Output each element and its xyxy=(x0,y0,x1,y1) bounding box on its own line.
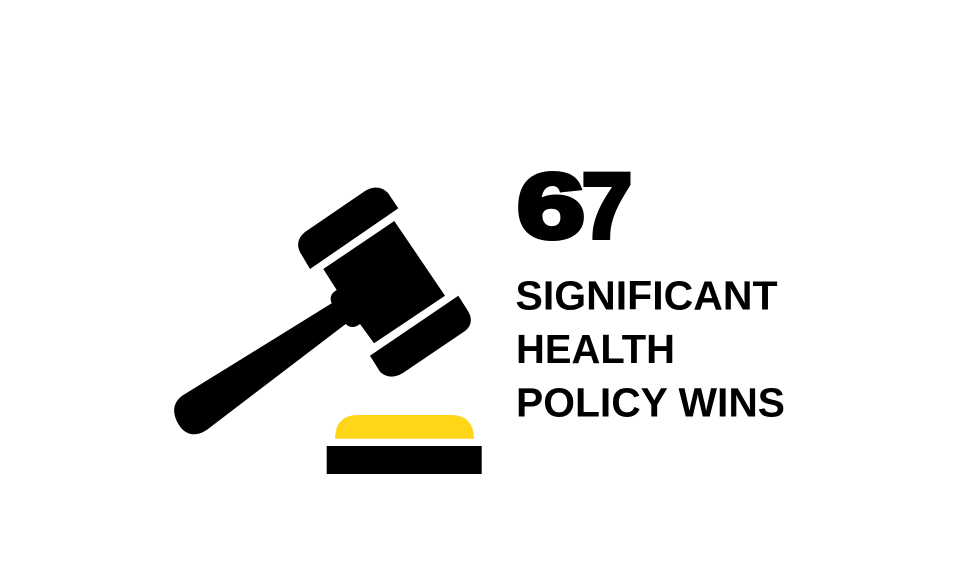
gavel head top cap xyxy=(298,187,398,269)
gavel head body and handle xyxy=(174,221,445,434)
digit 6: 6 xyxy=(517,156,585,258)
line 3: POLICY WINS xyxy=(516,380,785,426)
digit 7: 7 xyxy=(582,156,632,258)
gavel head bottom cap xyxy=(370,296,471,377)
line 1: SIGNIFICANT xyxy=(516,272,778,318)
icon: gavel xyxy=(174,187,471,434)
line 2: HEALTH xyxy=(516,326,675,372)
statistic: 67 xyxy=(517,156,632,258)
icon: sounding block xyxy=(327,415,482,474)
block base, black xyxy=(327,446,482,474)
label: significant health policy wins xyxy=(516,272,785,426)
block top, yellow xyxy=(335,415,474,439)
